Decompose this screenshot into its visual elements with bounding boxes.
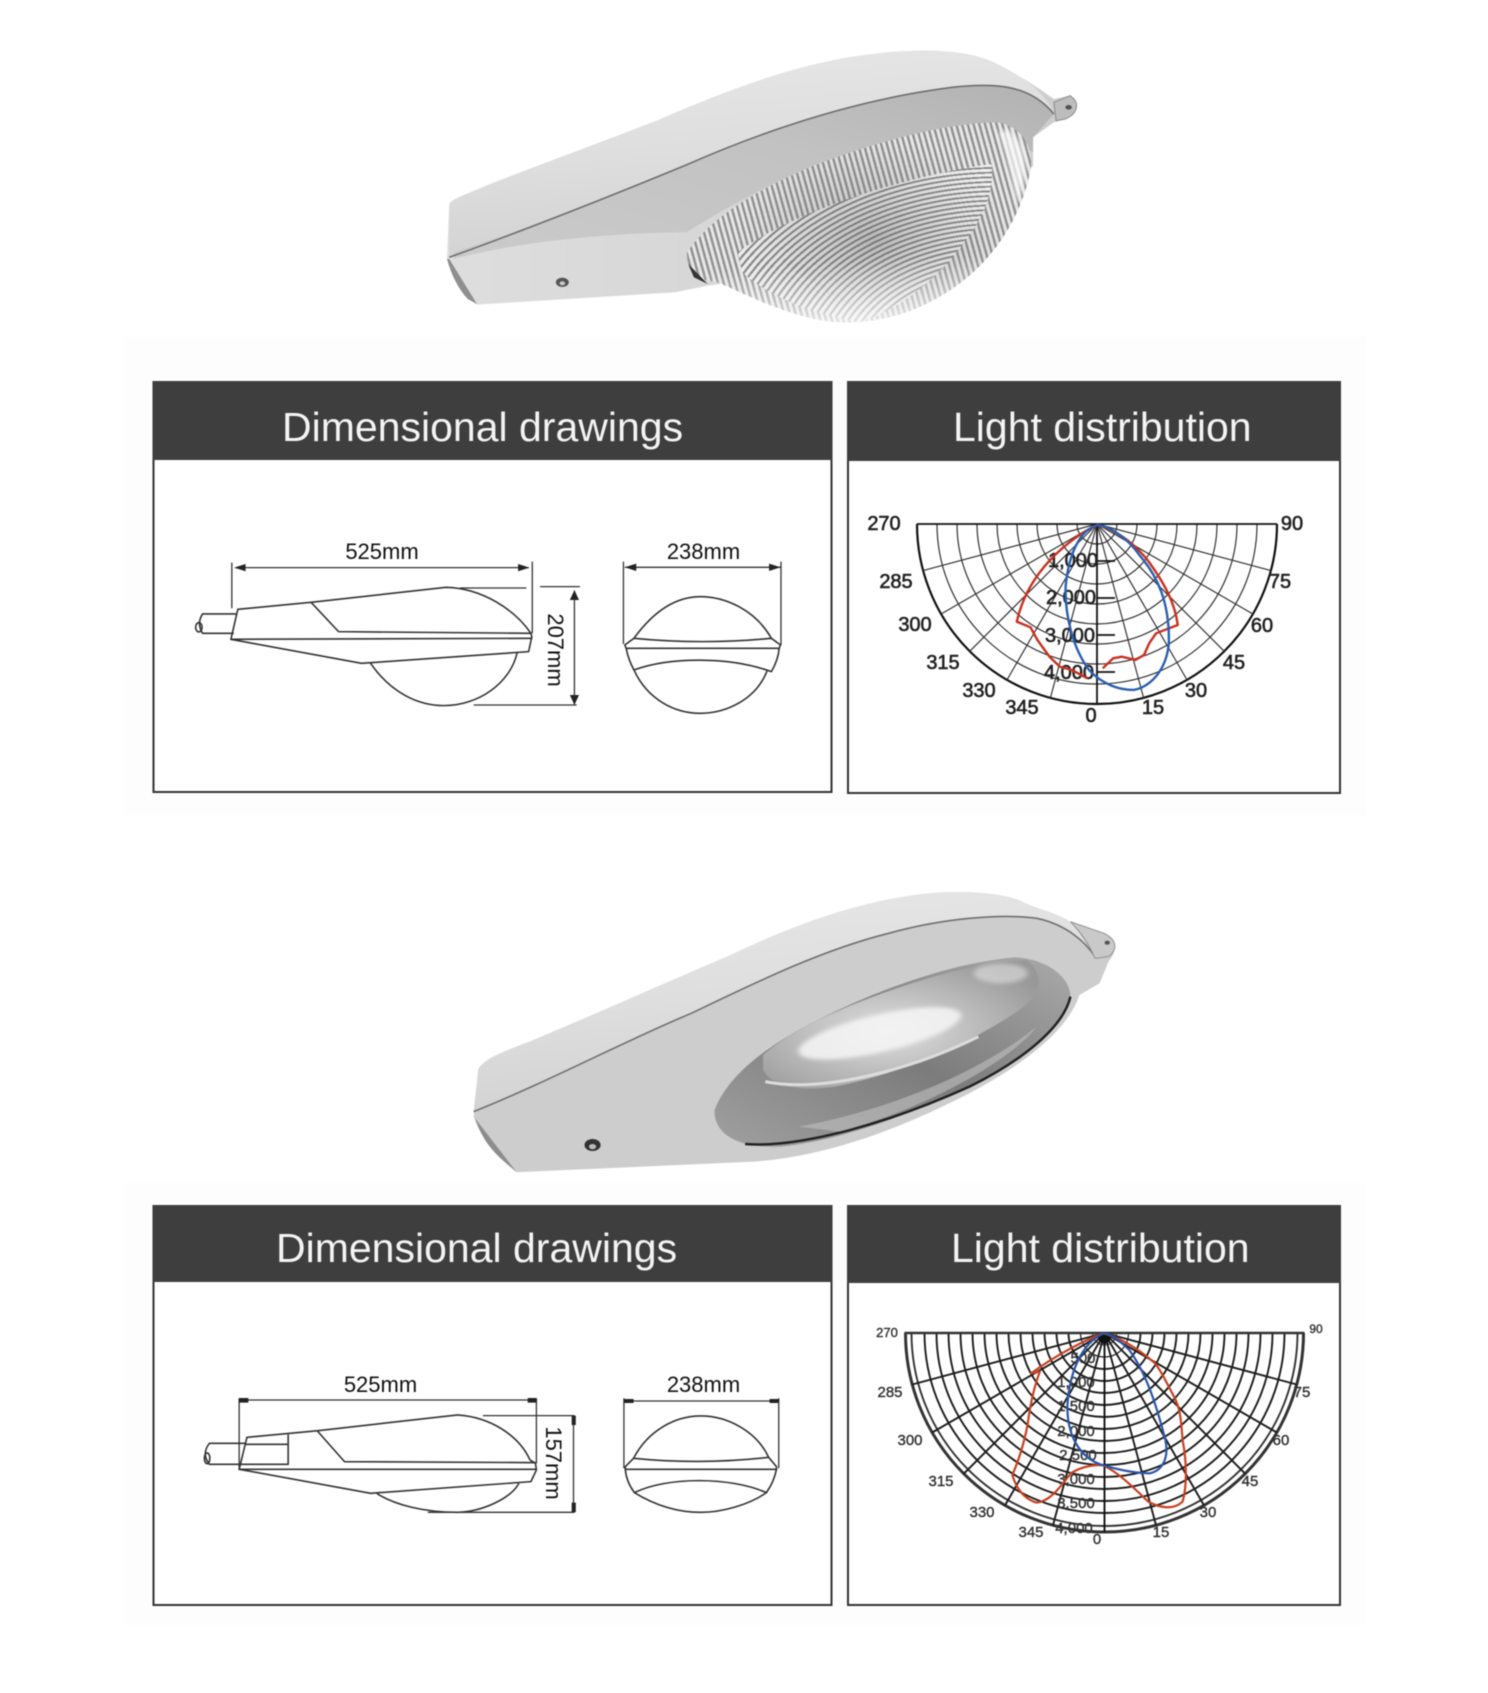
angle labels: 315 [928,1473,954,1490]
photo: street lamp with prismatic lens [447,51,1077,322]
lens highlight [687,122,1031,322]
seam line [449,85,1054,257]
intensity scale values: 3,000 [1045,625,1095,647]
angle labels: 270 [876,1325,898,1340]
heading: Dimensional drawings [282,404,683,450]
front view drawing [624,1398,779,1512]
panel frame [154,382,832,792]
screw [584,1139,601,1151]
front view drawing [623,562,781,713]
header bar [847,381,1341,461]
glass lower rim [745,997,1070,1144]
glass [715,957,1070,1147]
angle labels: 60 [1273,1432,1289,1449]
heading: Light distribution [953,404,1252,450]
angle labels: 330 [962,680,996,702]
reflector highlight [791,996,968,1070]
header bar [847,1205,1341,1283]
hinge [1054,96,1077,121]
photo: street lamp with flat glass [474,892,1115,1172]
angle labels: 60 [1251,615,1273,637]
height label: 207mm [543,613,568,687]
heading: Light distribution [951,1225,1250,1271]
panel: upper light distribution [847,344,1341,793]
reflector lower bright edge [765,1037,978,1085]
angle labels: 330 [969,1504,995,1521]
intensity scale values: 4,000 [1044,662,1094,684]
depth label: 238mm [667,1372,740,1397]
intensity scale values: 2,000 [1057,1423,1095,1440]
front edge of body [475,1118,516,1172]
hinge screw [1105,941,1110,945]
angle labels: 75 [1294,1384,1310,1401]
red curve [1017,525,1178,678]
lamp body silhouette [474,892,1115,1172]
angle labels: 15 [1153,1524,1169,1541]
angle labels: 345 [1018,1524,1044,1541]
red curve [1012,1333,1186,1507]
angle labels: 90 [1281,513,1303,535]
polar grid [903,1330,1306,1534]
lower glass reflection [799,1027,1037,1132]
panel: lower light distribution [846,1204,1342,1607]
intensity scale values: 2,000 [1046,587,1096,609]
backdrop panel: upper product [124,337,1365,815]
panel frame [848,382,1340,793]
height label: 157mm [541,1426,566,1500]
angle labels: 270 [867,513,901,535]
panel: upper dimensional drawings [153,381,832,792]
angle labels: 300 [897,1432,923,1449]
hinge [1070,922,1115,958]
backdrop panel: lower product [124,1183,1365,1625]
prismatic lens front concentric ribs [738,164,992,322]
lens shading [687,122,1031,322]
angle labels: 285 [879,571,913,593]
angle labels [867,513,1303,727]
angle labels: 30 [1200,1504,1216,1521]
panel frame [154,1206,832,1605]
intensity scale values: 4,000 [1055,1520,1093,1537]
intensity scale values [1055,1350,1097,1537]
side view drawing [204,1398,576,1512]
angle labels: 0 [1085,705,1097,727]
angle labels: 15 [1142,697,1164,719]
angle labels: 345 [1005,697,1039,719]
seam line [474,916,1095,1112]
header bar [153,1205,832,1282]
front edge of body [447,259,477,304]
angle labels [876,1322,1323,1548]
intensity scale values: 1,000 [1048,550,1098,572]
angle labels: 75 [1269,571,1291,593]
prismatic lens rear ribs [687,122,1031,322]
width label: 525mm [344,1372,417,1397]
upper shell [474,892,1095,1112]
intensity scale values: 3,500 [1057,1495,1095,1512]
lamp body silhouette [447,51,1077,305]
angle labels: 300 [898,614,932,636]
side view drawing [196,562,580,706]
angle labels: 45 [1223,652,1245,674]
polar grid [915,522,1279,706]
width label: 525mm [345,539,419,564]
intensity scale values: 1,500 [1057,1398,1095,1415]
panel: lower dimensional drawings [153,1205,832,1605]
angle labels: 45 [1242,1473,1258,1490]
intensity scale values: 1,000 [1057,1374,1095,1391]
intensity scale values: 500 [1070,1350,1096,1367]
angle labels: 315 [926,652,960,674]
angle labels: 0 [1093,1531,1101,1548]
blue curve [1066,525,1169,690]
seam band [454,85,1054,259]
intensity scale values: 3,000 [1057,1471,1095,1488]
hinge screw [1065,105,1072,110]
lens right-hand glare [998,129,1025,206]
heading: Dimensional drawings [276,1225,677,1271]
angle labels: 30 [1185,680,1207,702]
reflector upper-right glare [974,963,1028,983]
reflector [763,961,1039,1088]
lens shadow under body [688,264,708,284]
blue curve [1067,1333,1166,1473]
intensity scale values [1044,550,1098,684]
panel frame [848,1206,1340,1605]
intensity scale values: 2,500 [1059,1447,1097,1464]
angle labels: 285 [877,1384,903,1401]
depth label: 238mm [667,539,740,564]
screw [556,278,569,287]
header bar [153,381,832,460]
upper shell [449,51,1054,257]
angle labels: 90 [1309,1322,1323,1336]
